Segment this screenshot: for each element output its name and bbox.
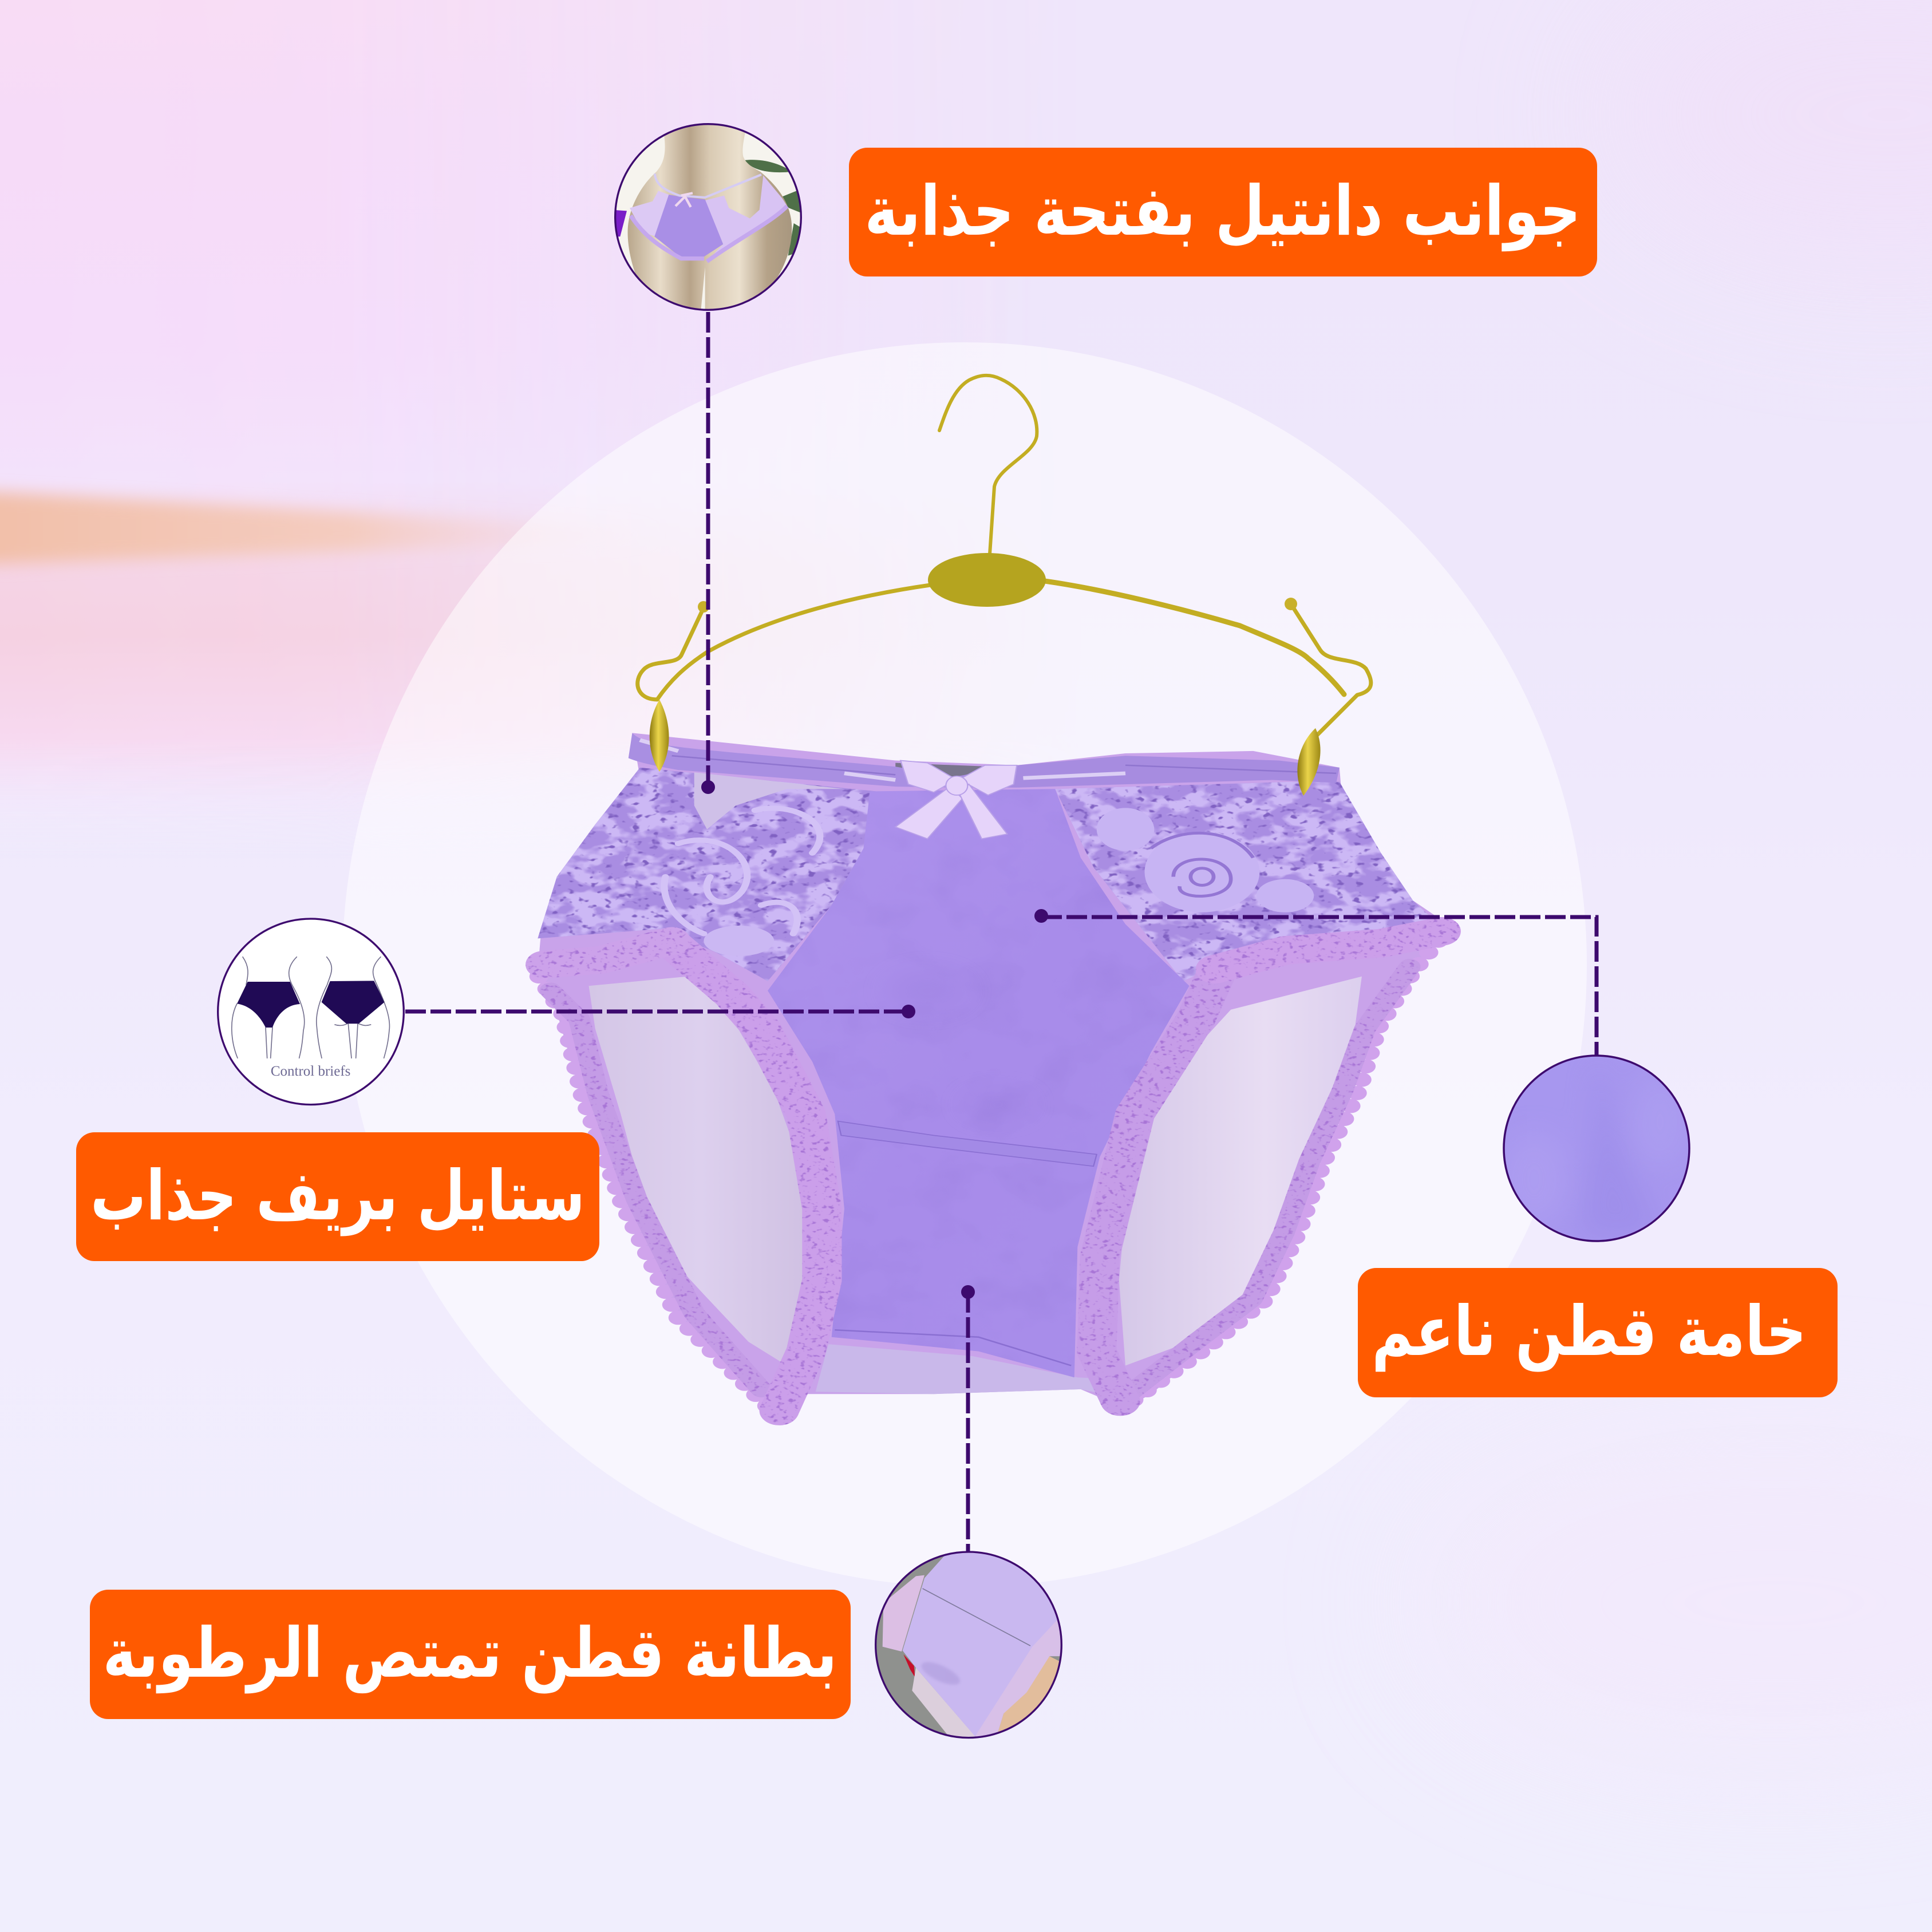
waistband right [953,756,1340,788]
bottom mesh [816,1344,1125,1396]
left gold clip [650,700,669,772]
left lace trim [883,1575,924,1652]
left mesh panel [589,977,812,1365]
right lace rose petals [1151,833,1253,896]
bottom hem stitching [835,1330,1071,1365]
satin bow [895,760,1017,839]
swatch fill [1500,1053,1694,1248]
label: lace sides [849,148,1597,276]
label: soft cotton: خامة قطن ناعم [1372,1291,1807,1372]
icon caption: Control briefs [271,1064,350,1079]
garment on hanger [538,376,1451,1416]
left lace panel [538,768,876,981]
line to cotton lining [966,1292,970,1552]
left brief [237,982,300,1028]
red accent [903,1654,915,1677]
cotton lining [903,1551,1069,1736]
label: brief style [76,1132,599,1261]
hanger left arm [657,585,930,700]
torso [628,122,792,317]
callout dots [701,780,1048,1299]
right lace trim [975,1620,1065,1739]
lace right [705,176,787,262]
sheer mesh [912,1668,977,1739]
right mesh panel [1119,977,1362,1365]
line to brief style [405,1010,908,1013]
left lace motifs [664,808,820,934]
lace trim eyelets [544,931,1441,1411]
right brief [322,981,385,1024]
line to lace sides [706,312,710,787]
right top trim [1215,931,1441,969]
gusset seam [838,1121,1097,1166]
ring [876,1552,1061,1738]
central white circle [342,342,1587,1587]
label: cotton lining: بطانة قطن تمتص الرطوبة [103,1613,837,1693]
skin [996,1656,1065,1739]
body outlines [232,957,389,1058]
icon: cotton lining photo [874,1551,1069,1740]
waist strap [655,173,761,197]
swatch ring [1504,1056,1689,1241]
brief trims [631,206,787,262]
lace trims [539,929,1448,1413]
brief bow [675,193,693,207]
swatch folds [1500,1059,1689,1236]
inner right trim [1097,977,1215,1401]
inner left trim [672,943,822,1411]
hanger [638,376,1371,736]
left lace flower [704,926,774,956]
hanger right arm [1045,581,1344,694]
hanger plate [928,553,1046,607]
icon disc [218,919,404,1105]
label: cotton lining [90,1590,851,1719]
right clip wire [1291,604,1371,736]
label: soft cotton [1358,1268,1838,1397]
seam line [923,1589,1030,1646]
icon: control briefs [218,919,404,1105]
outer right trim [1129,967,1410,1394]
fold shadow [918,1658,963,1689]
line to soft fabric [1041,917,1597,1056]
callout lines [405,312,1597,1552]
right lace rose [1097,808,1314,912]
icon: lace side cut-out photo [613,122,805,317]
label: brief style: ستايل بريف جذاب [90,1156,585,1236]
brief panel [654,195,723,258]
gravel backdrop [874,1551,1065,1740]
waistband gap [895,763,1017,777]
waistband left [629,733,956,788]
icon: soft fabric swatch [1500,1053,1694,1248]
left clip wire [638,608,704,700]
outer left trim [551,991,761,1389]
garment [538,733,1451,1416]
garment silhouette [538,733,1451,1416]
lace left [630,191,669,236]
waistband highlights [640,740,1336,780]
label: lace sides: جوانب دانتيل بفتحة جذابة [864,172,1581,251]
ring [615,124,801,310]
hanger knobs [698,598,1297,613]
outer left scallops [539,977,774,1413]
background [0,0,1932,784]
green leaves [744,160,803,256]
outer right scallops [1129,929,1448,1404]
left top trim [544,941,672,965]
purple item [616,210,627,237]
fabric shading [889,971,1030,1119]
left lace sheer area [694,772,844,829]
right gold clip [1297,728,1321,796]
right lace panel [1055,782,1439,981]
main cotton panel [768,789,1190,1377]
hanger hook [939,376,1037,554]
